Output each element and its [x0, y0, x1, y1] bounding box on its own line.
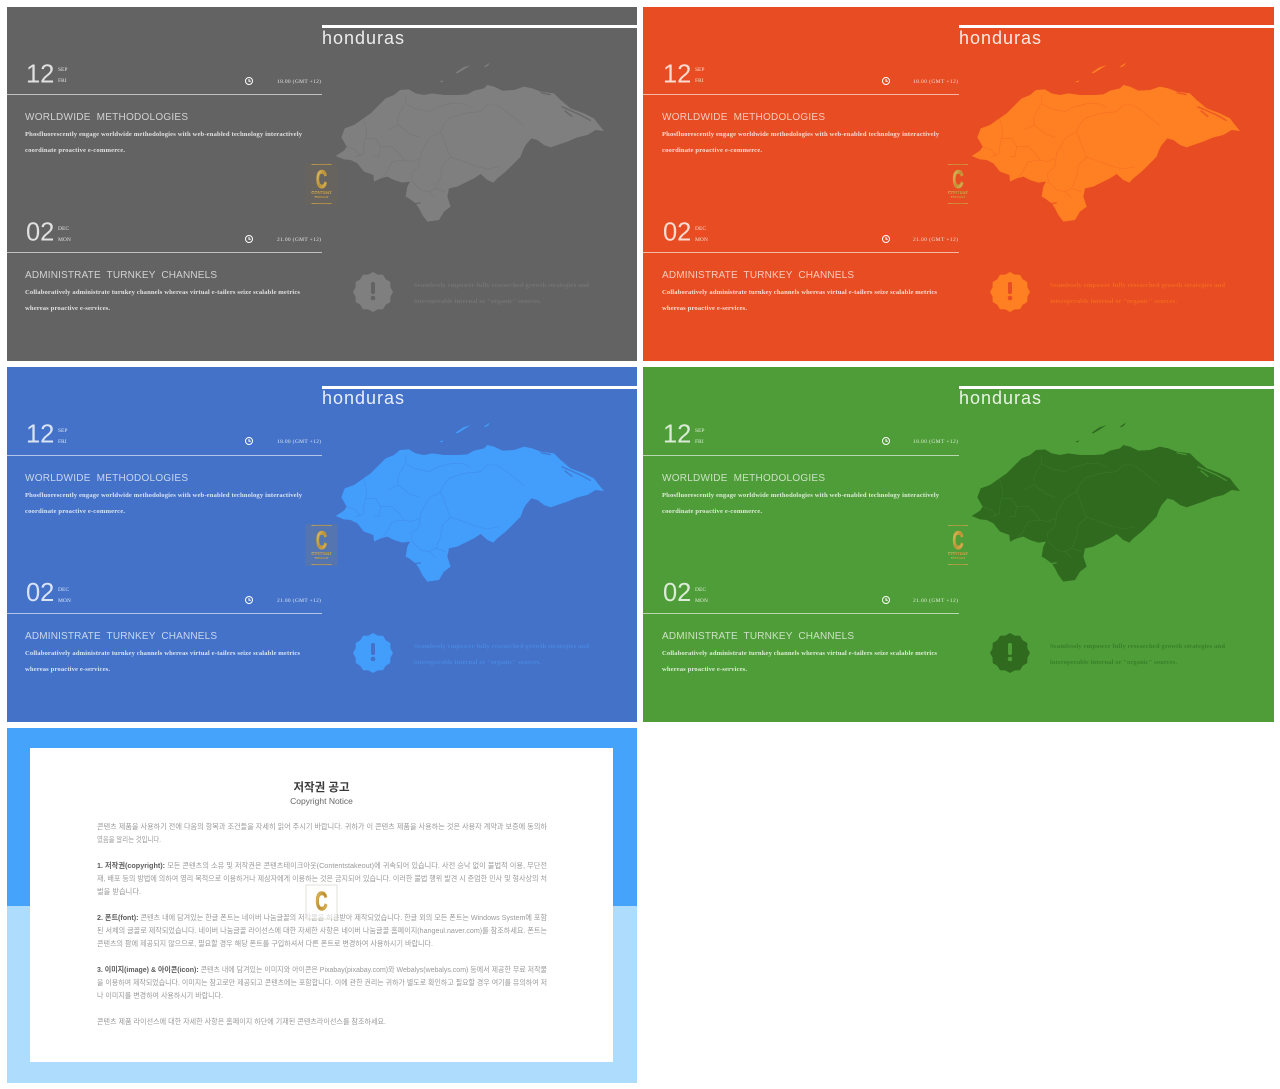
icon: warning badge: [990, 633, 1030, 673]
notice item 2: [97, 912, 547, 948]
event time 2: 21.00 (GMT +12): [913, 236, 958, 243]
logo: TAKEOUT: [314, 195, 329, 199]
notice intro: 였음을 알리는 것입니다.: [97, 834, 161, 844]
event date 1: [26, 420, 67, 448]
icon: clock 1: [246, 438, 252, 444]
event date 1: SEP: [695, 428, 704, 434]
icon: warning badge: [353, 272, 393, 312]
title: honduras: [322, 388, 404, 408]
heading 1: WORLDWIDE METHODOLOGIES: [25, 112, 188, 123]
event date 2: MON: [58, 237, 71, 243]
event date 2: [663, 579, 708, 607]
logo: [306, 524, 338, 566]
notice item 2: 된 서체의 글꼴로 제작되었습니다. 네이버 나눔글꼴 라이선스에 대한 자세한 사항은 네이버 나눔글꼴 홈페이지(hangeul.naver.com)를 참조하세요. 폰트는: [97, 925, 547, 935]
callout text: Seamlessly empower fully researched growth strategies and: [414, 282, 589, 289]
event time 2: 21.00 (GMT +12): [913, 597, 958, 604]
callout text: [1050, 282, 1225, 305]
event date 2: DEC: [695, 587, 706, 593]
text block 2: [25, 289, 300, 312]
text block 2: whereas proactive e-services.: [662, 666, 747, 673]
logo: CONTENT: [948, 190, 969, 195]
text block 2: [662, 289, 937, 312]
callout text: [1050, 643, 1225, 666]
notice item 1: 벌을 받습니다.: [97, 886, 141, 896]
notice item 1: 재, 배포 등의 방법에 의하여 영리 목적으로 이용하거나 제삼자에게 이용하는 것은 금지되어 있습니다. 이러한 불법 행위 발견 시 준엄한 민사 및 형사상의 처: [97, 873, 547, 883]
title: honduras: [959, 28, 1041, 48]
text block 1: [25, 492, 303, 515]
heading 2: ADMINISTRATE TURNKEY CHANNELS: [25, 631, 217, 642]
event date 2: 02: [26, 579, 54, 607]
notice subtitle: Copyright Notice: [290, 796, 353, 806]
map: honduras green: [972, 423, 1240, 582]
logo: C: [316, 166, 327, 194]
text block 1: coordinate proactive e-commerce.: [25, 508, 125, 515]
notice item 1: 1. 저작권(copyright): 모든 콘텐츠의 소유 및 저작권은 콘텐츠테이크아웃(Contentstakeout)에 귀속되어 있습니다. 사전 승낙 없이 불법적 이용, 무단전: [97, 860, 547, 870]
logo: [948, 164, 969, 204]
callout text: interoperable internal or "organic" sources.: [414, 659, 541, 666]
text block 1: coordinate proactive e-commerce.: [662, 508, 762, 515]
event time 2: 21.00 (GMT +12): [277, 597, 321, 604]
event time 1: 18.00 (GMT +12): [277, 438, 321, 445]
event date 2: 02: [26, 218, 54, 246]
callout text: Seamlessly empower fully researched growth strategies and: [1050, 282, 1225, 289]
map: honduras orange: [972, 63, 1240, 222]
logo: C: [953, 166, 963, 194]
title bar: [322, 25, 637, 28]
icon: clock 1: [246, 78, 252, 84]
title bar: [959, 386, 1274, 389]
icon: warning badge: [353, 633, 393, 673]
logo: C: [316, 527, 327, 555]
notice item 3: 3. 이미지(image) & 아이콘(icon): 콘텐츠 내에 담겨있는 이미지와 아이콘은 Pixabay(pixabay.com)와 Webalys(webalys.com) 등에서 제공한 무료 저작물: [97, 964, 547, 974]
logo: [306, 885, 337, 919]
text block 2: Collaboratively administrate turnkey channels whereas virtual e-tailers seize scalable metrics: [25, 289, 300, 296]
panel: copyright notice: [7, 728, 637, 1083]
icon: clock 1: [882, 78, 890, 84]
notice item 3: [97, 964, 547, 1000]
event date 1: FRI: [58, 78, 67, 84]
event date 2: MON: [695, 237, 708, 243]
text block 1: Phosfluorescently engage worldwide methodologies with web-enabled technology interactively: [25, 131, 303, 138]
text block 1: [25, 131, 303, 154]
text block 1: coordinate proactive e-commerce.: [25, 147, 125, 154]
callout text: [414, 643, 589, 666]
text block 2: [662, 650, 937, 673]
event date 1: FRI: [58, 439, 67, 445]
title bar: [322, 386, 637, 389]
panel: orange slide: [643, 7, 1274, 361]
text block 2: whereas proactive e-services.: [662, 305, 747, 312]
event date 1: 12: [26, 60, 54, 88]
text block 2: Collaboratively administrate turnkey channels whereas virtual e-tailers seize scalable metrics: [662, 289, 937, 296]
text block 1: Phosfluorescently engage worldwide methodologies with web-enabled technology interactively: [662, 492, 940, 499]
notice item 3: 을 이용하여 제작되었습니다. 이미지는 참고로만 제공되고 콘텐츠에는 포함합니다. 이에 관한 권리는 귀하가 별도로 확인하고 필요할 경우 여기를 유의하여 저: [97, 977, 547, 987]
title: honduras: [322, 28, 404, 48]
text block 2: whereas proactive e-services.: [25, 666, 110, 673]
callout text: interoperable internal or "organic" sources.: [1050, 298, 1177, 305]
icon: clock 2: [882, 236, 890, 242]
event date 1: SEP: [58, 428, 67, 434]
text block 1: [662, 492, 940, 515]
logo: [306, 163, 338, 205]
event date 2: 02: [663, 579, 691, 607]
logo: TAKEOUT: [951, 195, 965, 199]
event time 1: 18.00 (GMT +12): [913, 78, 958, 85]
callout text: interoperable internal or "organic" sources.: [1050, 659, 1177, 666]
event date 2: [26, 218, 71, 246]
text block 1: [662, 131, 940, 154]
callout text: [414, 282, 589, 305]
text block 2: [25, 650, 300, 673]
notice footer: 콘텐츠 제품 라이선스에 대한 자세한 사항은 홈페이지 하단에 기재된 콘텐츠라이선스를 참조하세요.: [97, 1016, 386, 1026]
event date 1: [26, 60, 67, 88]
event date 1: 12: [663, 60, 691, 88]
event date 2: MON: [695, 598, 708, 604]
panel: blue slide: [7, 367, 637, 722]
event date 2: DEC: [58, 587, 69, 593]
callout text: interoperable internal or "organic" sources.: [414, 298, 541, 305]
notice item 3: 나 이미지를 변경하여 사용하시기 바랍니다.: [97, 990, 223, 1000]
text block 1: Phosfluorescently engage worldwide methodologies with web-enabled technology interactively: [25, 492, 303, 499]
event date 2: MON: [58, 598, 71, 604]
logo: C: [316, 886, 328, 916]
text block 1: coordinate proactive e-commerce.: [662, 147, 762, 154]
text block 2: Collaboratively administrate turnkey channels whereas virtual e-tailers seize scalable metrics: [25, 650, 300, 657]
callout text: Seamlessly empower fully researched growth strategies and: [1050, 643, 1225, 650]
logo: CONTENT: [311, 190, 332, 195]
logo: CONTENT: [948, 551, 969, 556]
event time 2: 21.00 (GMT +12): [277, 236, 321, 243]
logo: C: [953, 527, 963, 555]
event date 1: [663, 420, 704, 448]
text block 2: Collaboratively administrate turnkey channels whereas virtual e-tailers seize scalable metrics: [662, 650, 937, 657]
panel: green slide: [643, 367, 1274, 722]
icon: clock 2: [246, 596, 252, 604]
event date 1: 12: [663, 420, 691, 448]
event date 1: SEP: [695, 67, 704, 73]
logo: [948, 525, 969, 565]
event date 2: [26, 579, 71, 607]
notice title: 저작권 공고: [293, 780, 350, 794]
map: honduras gray: [336, 63, 604, 222]
event date 2: [663, 218, 708, 246]
logo: TAKEOUT: [951, 556, 965, 560]
icon: warning badge: [990, 272, 1030, 312]
notice item 1: [97, 860, 547, 896]
event date 1: 12: [26, 420, 54, 448]
event date 2: 02: [663, 218, 691, 246]
heading 2: ADMINISTRATE TURNKEY CHANNELS: [25, 270, 217, 281]
heading 1: WORLDWIDE METHODOLOGIES: [25, 473, 188, 484]
notice item 2: 2. 폰트(font): 콘텐츠 내에 담겨있는 한글 폰트는 네이버 나눔글꼴의 저작물을 허용받아 제작되었습니다. 한글 외의 모든 폰트는 Windows System에 포함: [97, 912, 547, 922]
icon: clock 1: [882, 438, 890, 444]
event date 1: FRI: [695, 439, 704, 445]
event date 1: [663, 60, 704, 88]
heading 1: WORLDWIDE METHODOLOGIES: [662, 473, 825, 484]
map: honduras blue: [336, 423, 604, 582]
heading 1: WORLDWIDE METHODOLOGIES: [662, 112, 825, 123]
text block 2: whereas proactive e-services.: [25, 305, 110, 312]
title: honduras: [959, 388, 1041, 408]
notice intro: 콘텐츠 제품을 사용하기 전에 다음의 항목과 조건들을 자세히 읽어 주시기 바랍니다. 귀하가 이 콘텐츠 제품을 사용하는 것은 사용자 계약과 보증에 동의하: [97, 821, 547, 831]
event date 2: DEC: [58, 226, 69, 232]
icon: clock 2: [246, 236, 252, 242]
event time 1: 18.00 (GMT +12): [277, 78, 321, 85]
event date 1: FRI: [695, 78, 704, 84]
logo: CONTENT: [311, 551, 332, 556]
event time 1: 18.00 (GMT +12): [913, 438, 958, 445]
notice item 2: 콘텐츠의 팜에 제공되지 않으므로, 필요할 경우 해당 폰트를 구입하셔서 다른 폰트로 변경하여 사용하시기 바랍니다.: [97, 938, 433, 948]
text block 1: Phosfluorescently engage worldwide methodologies with web-enabled technology interactively: [662, 131, 940, 138]
heading 2: ADMINISTRATE TURNKEY CHANNELS: [662, 631, 854, 642]
title bar: [959, 25, 1274, 28]
callout text: Seamlessly empower fully researched growth strategies and: [414, 643, 589, 650]
heading 2: ADMINISTRATE TURNKEY CHANNELS: [662, 270, 854, 281]
event date 1: SEP: [58, 67, 67, 73]
notice intro: [97, 821, 547, 844]
panel: gray slide: [7, 7, 637, 361]
event date 2: DEC: [695, 226, 706, 232]
logo: TAKEOUT: [314, 556, 329, 560]
icon: clock 2: [882, 596, 890, 604]
